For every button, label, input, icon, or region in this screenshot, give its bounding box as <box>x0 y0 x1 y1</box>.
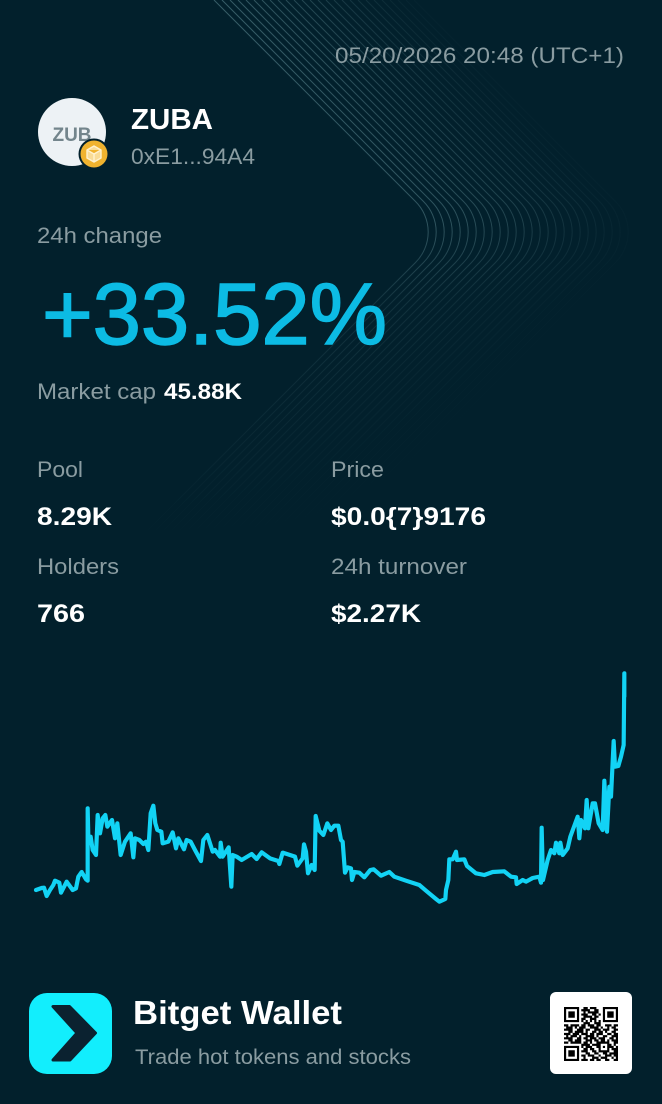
avatar initials: ZUB <box>52 125 92 146</box>
avatar circle <box>38 98 106 166</box>
24h change value: +33.52% <box>42 266 387 363</box>
token name: ZUBA <box>131 104 213 136</box>
token avatar with chain badge <box>38 98 110 170</box>
QR code <box>550 992 632 1074</box>
icon: Bitget Wallet logo <box>29 993 112 1074</box>
market cap <box>37 379 242 404</box>
token address: 0xE1...94A4 <box>131 144 255 169</box>
timestamp: 05/20/2026 20:48 (UTC+1) <box>335 43 624 68</box>
stat: holders: 766 <box>37 600 85 628</box>
stat: price <box>331 457 486 531</box>
icon: BNB chain badge <box>78 138 110 170</box>
stat: holders <box>37 554 119 628</box>
stat: 24h turnover: 24h turnover <box>331 554 467 579</box>
stat: price: Price <box>331 457 384 482</box>
stat: holders: Holders <box>37 554 119 579</box>
tagline: Trade hot tokens and stocks <box>135 1046 411 1069</box>
decorative chevron line pattern <box>140 0 628 538</box>
24h change label: 24h change <box>37 223 162 248</box>
stat: pool: Pool <box>37 457 83 482</box>
brand name: Bitget Wallet <box>133 994 342 1031</box>
stat: price: $0.0{7}9176 <box>331 503 486 531</box>
stat: pool <box>37 457 112 531</box>
market cap label: Market cap <box>37 379 156 404</box>
stat: 24h turnover <box>331 554 467 628</box>
stat: 24h turnover: $2.27K <box>331 600 421 628</box>
price line chart <box>36 673 624 902</box>
stat: pool: 8.29K <box>37 503 112 531</box>
market cap value: 45.88K <box>164 379 242 404</box>
